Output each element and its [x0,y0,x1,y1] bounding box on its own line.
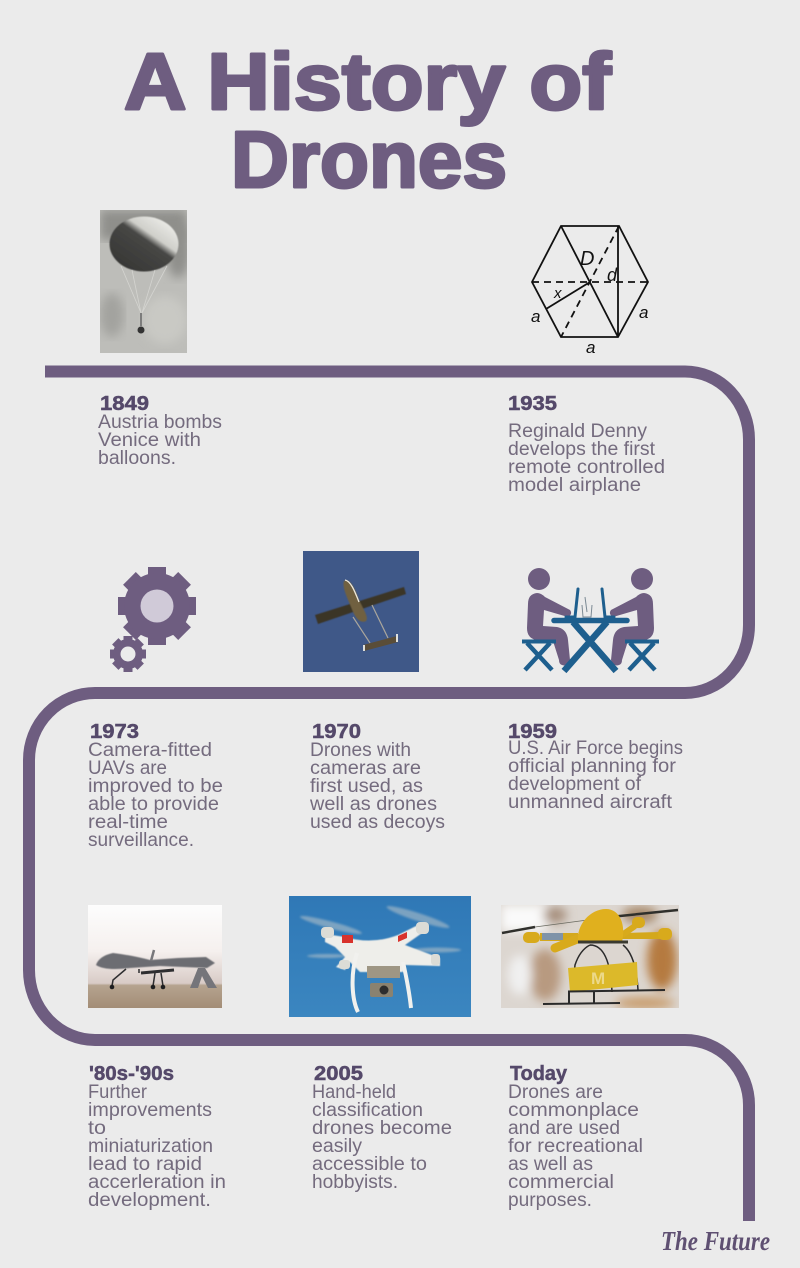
photo: predator drone [88,905,222,1008]
text: 2005 [312,1063,452,1193]
text: 1970: used as decoys [310,812,445,833]
text: 1970: cameras are [310,758,421,779]
text: 1849: 1849 [100,393,149,415]
text: 1973: UAVs are [88,758,167,779]
text: Today: and are used [508,1118,620,1139]
icon: hexagon diagram: x [553,285,562,302]
text: 1970: well as drones [309,794,437,815]
icon: two people at laptops [522,568,659,671]
text: 1849: balloons. [98,448,176,469]
table and stools [554,618,627,623]
text: Today: for recreational [508,1136,643,1157]
text: '80s-'90s: Further [88,1082,148,1103]
text: 2005: classification [312,1100,423,1121]
text: '80s-'90s: accerleration in [88,1172,226,1193]
icon: gears [110,567,196,672]
text: 1973: Camera-fitted [88,740,212,761]
text: '80s-'90s: '80s-'90s [89,1063,174,1085]
text: 1973 [88,721,223,851]
photo: white quadcopter [289,896,471,1017]
text: 1935: develops the first [508,439,656,460]
timeline path [29,372,749,1221]
right person [610,593,654,665]
icon: hexagon diagram: a [639,303,648,322]
text: '80s-'90s [88,1063,226,1211]
text: '80s-'90s: miniaturization [88,1136,213,1157]
text: 2005: hobbyists. [312,1172,398,1193]
text: 1973: improved to be [88,776,223,797]
photo: fixed-wing drone [303,551,419,672]
text: 1959: U.S. Air Force begins [508,738,683,759]
text: 1935 [508,393,665,496]
icon: hexagon diagram: a [586,338,595,357]
text: '80s-'90s: lead to rapid [88,1154,202,1175]
text: 1959: official planning for [508,756,677,777]
text: Today: Today [510,1063,568,1085]
text: 1935: model airplane [508,475,641,496]
text: 1935: 1935 [508,393,557,415]
text: 1970 [309,721,445,833]
text: 1973: real-time [88,812,168,833]
text: 1849 [98,393,222,469]
text: '80s-'90s: to [88,1118,106,1139]
left person [527,593,571,665]
text: 1970: first used, as [310,776,423,797]
text: 1973: surveillance. [88,830,194,851]
photo: yellow delivery drone: M [591,969,605,988]
text: 1959: development of [508,774,642,795]
title: A History of [124,37,611,126]
icon: hexagon diagram: a [531,307,540,326]
photo: balloon [100,210,190,353]
text: Today: Drones are [508,1082,603,1103]
title [124,37,611,204]
text: 2005: Hand-held [312,1082,396,1103]
text: 1935: remote controlled [508,457,665,478]
icon: hexagon diagram: d [607,265,618,285]
text: 1959: 1959 [508,721,557,743]
text: 1973: 1973 [90,721,139,743]
text: 2005: accessible to [312,1154,427,1175]
text: Today: commercial [508,1172,614,1193]
text: '80s-'90s: development. [88,1190,211,1211]
text: Today: purposes. [508,1190,592,1211]
label: The Future: The Future [661,1226,770,1256]
text: Today [508,1063,643,1211]
text: 2005: 2005 [314,1063,363,1085]
text: 1970: 1970 [312,721,361,743]
icon: hexagon diagram: D [580,248,594,270]
text: 1935: Reginald Denny [508,421,648,442]
text: 1849: Venice with [98,430,201,451]
text: Today: commonplace [508,1100,639,1121]
text: 1849: Austria bombs [98,412,222,433]
text: 1959: unmanned aircraft [508,792,673,813]
icon: hexagon diagram [531,226,648,357]
text: Today: as well as [508,1154,593,1175]
text: 1973: able to provide [88,794,219,815]
text: 1970: Drones with [310,740,411,761]
text: 2005: easily [312,1136,363,1157]
text: 1959 [508,721,683,813]
text: 2005: drones become [312,1118,452,1139]
text: '80s-'90s: improvements [88,1100,212,1121]
title: Drones [231,115,507,204]
photo: yellow delivery drone [501,905,679,1009]
